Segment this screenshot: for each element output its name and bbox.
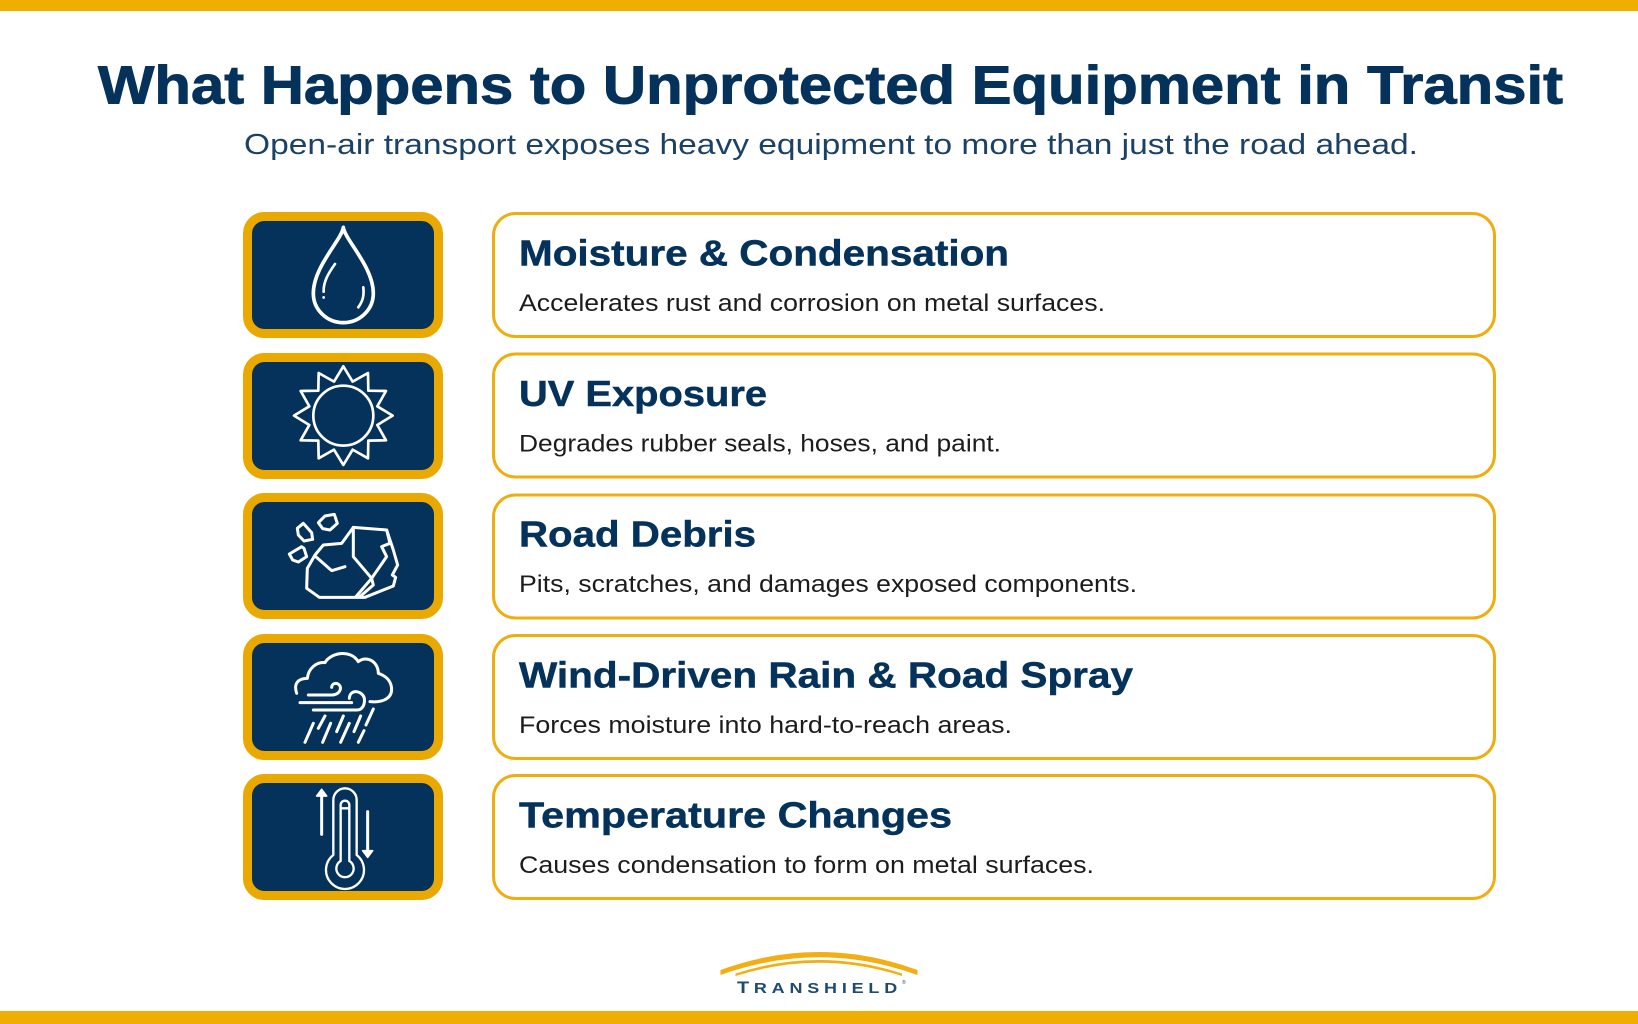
card: UV exposure: UV Exposure — [519, 373, 767, 414]
card: temperature changes: Causes condensation to form on metal surfaces. — [519, 852, 1094, 879]
card: road debris: Road Debris — [519, 514, 756, 554]
card: wind-driven rain and road spray: Wind-Driven Rain & Road Spray — [519, 654, 1133, 696]
icon: sun — [248, 358, 438, 474]
top bar — [0, 0, 1638, 11]
card: temperature changes — [494, 776, 1494, 898]
logo: Transhield: ® — [902, 979, 906, 986]
card: temperature changes: Temperature Changes — [519, 794, 952, 836]
card: road debris: Pits, scratches, and damages exposed components. — [519, 571, 1137, 598]
bottom bar — [0, 1011, 1638, 1024]
icon: water drop — [248, 216, 438, 334]
icon: thermometer — [248, 778, 438, 896]
card: moisture and condensation: Accelerates rust and corrosion on metal surfaces. — [519, 290, 1105, 317]
card: moisture and condensation: Moisture & Condensation — [519, 232, 1009, 274]
icon: road debris — [248, 498, 438, 614]
logo: Transhield — [720, 952, 918, 997]
subtitle: Open-air transport exposes heavy equipment to more than just the road ahead. — [244, 129, 1418, 161]
card: moisture and condensation — [494, 214, 1494, 336]
logo: Transhield: TRANSHIELD — [737, 979, 902, 997]
card: UV exposure: Degrades rubber seals, hoses, and paint. — [519, 430, 1001, 458]
title: What Happens to Unprotected Equipment in Transit — [98, 56, 1563, 116]
card: road debris — [494, 495, 1494, 618]
icon: wind-driven rain — [248, 638, 438, 756]
card: wind-driven rain and road spray — [494, 636, 1494, 758]
card: UV exposure — [494, 354, 1494, 477]
card: wind-driven rain and road spray: Forces moisture into hard-to-reach areas. — [519, 712, 1012, 739]
